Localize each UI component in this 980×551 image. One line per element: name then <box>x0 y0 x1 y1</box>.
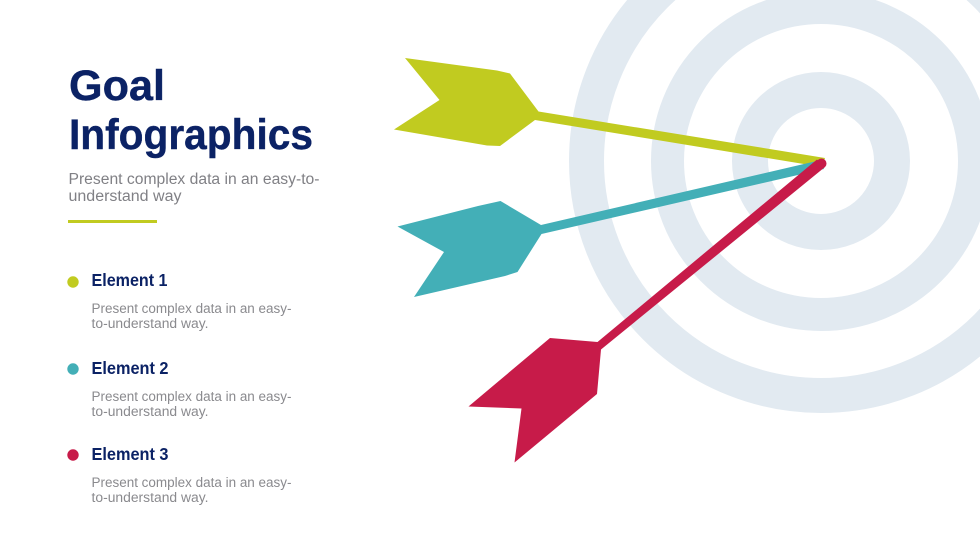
arrow: crimson <box>468 158 826 462</box>
legend item: Element 2: to-understand way. <box>92 404 208 419</box>
legend item: Element 2 <box>67 358 292 419</box>
legend item: Element 3: to-understand way. <box>92 490 208 505</box>
legend item: Element 3: Present complex data in an easy- <box>92 475 292 490</box>
arrow: yellow-green <box>394 58 825 167</box>
title: Goal <box>69 62 165 110</box>
legend item: Element 1: to-understand way. <box>92 316 208 331</box>
title underline <box>68 220 157 223</box>
subtitle: Present complex data in an easy-to- <box>68 171 320 188</box>
legend item: Element 3: Element 3 <box>92 444 169 464</box>
target rings <box>586 0 980 396</box>
subtitle <box>68 171 320 205</box>
legend item: Element 1: Present complex data in an easy- <box>92 301 292 316</box>
subtitle: understand way <box>68 188 182 205</box>
legend item: Element 2: Present complex data in an easy- <box>92 389 292 404</box>
legend item: Element 3 <box>67 444 292 505</box>
title: Infographics <box>69 111 313 159</box>
title <box>69 62 313 159</box>
legend item: Element 2: Element 2 <box>92 358 169 378</box>
legend item: Element 1: Element 1 <box>92 270 168 290</box>
legend item: Element 1 <box>67 270 292 331</box>
arrow: teal <box>398 160 824 297</box>
